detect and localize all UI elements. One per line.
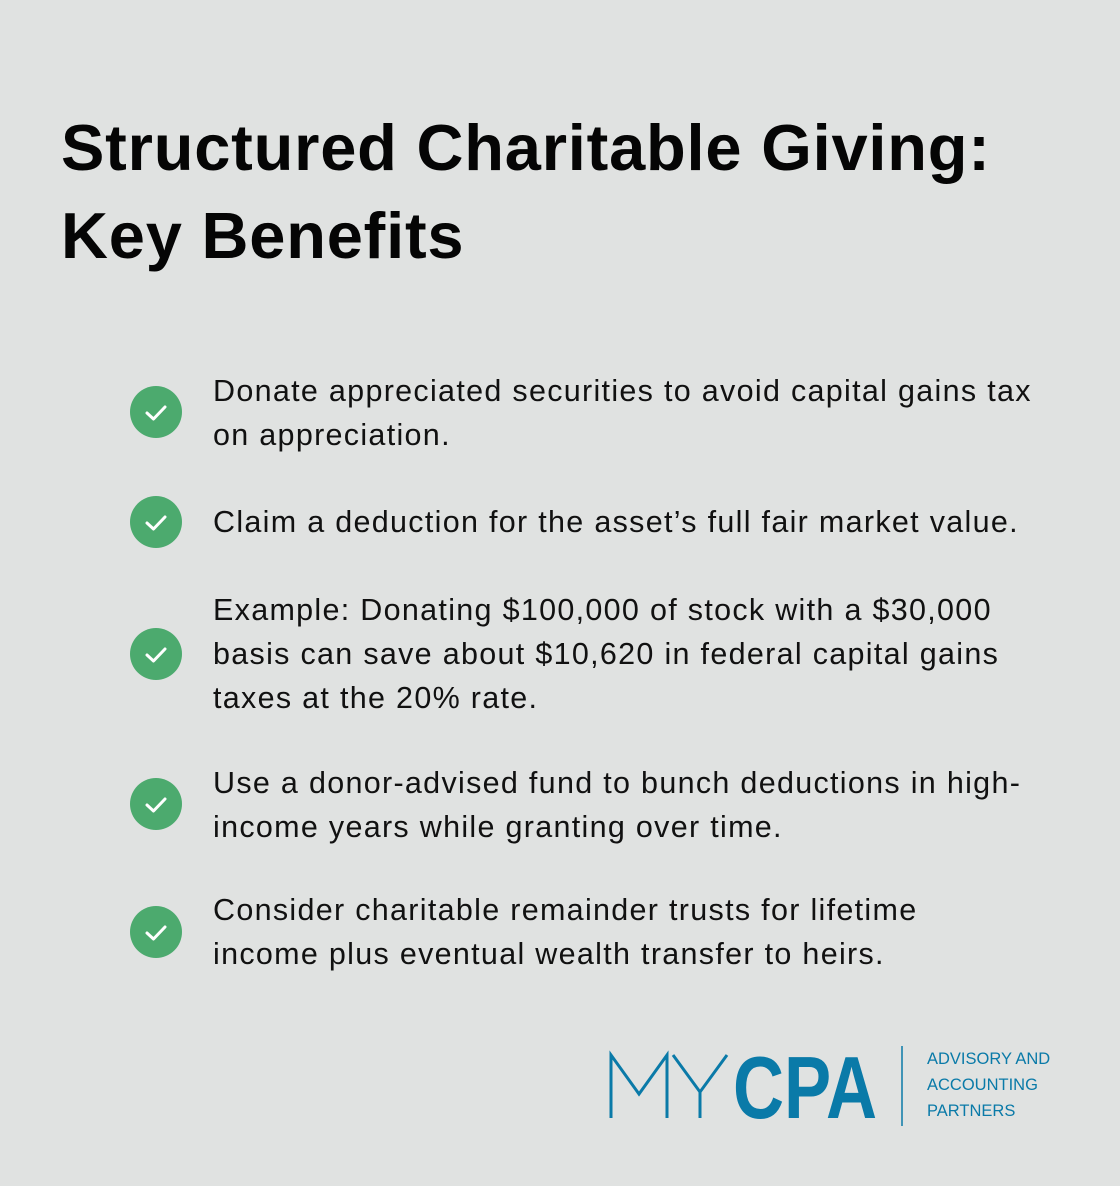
item 2 [130, 496, 1019, 548]
item 4 [130, 766, 1021, 844]
icon: check [130, 496, 182, 548]
text: Use a donor-advised fund to bunch deductions in high- [213, 766, 1021, 800]
logo tagline: ADVISORY AND [927, 1050, 1050, 1068]
text [213, 374, 1032, 452]
item 1 [130, 374, 1032, 452]
text: basis can save about $10,620 in federal capital gains [213, 637, 999, 671]
text: income plus eventual wealth transfer to heirs. [213, 937, 885, 971]
text: Claim a deduction for the asset’s full fair market value. [213, 505, 1019, 539]
text [213, 893, 917, 971]
title: Structured Charitable Giving: [61, 111, 991, 184]
icon: check [130, 906, 182, 958]
text [213, 766, 1021, 844]
icon: check [130, 386, 182, 438]
text: Example: Donating $100,000 of stock with a $30,000 [213, 593, 992, 627]
icon: check [130, 778, 182, 830]
logo wordmark MY [611, 1055, 727, 1118]
icon: check [130, 628, 182, 680]
text [213, 593, 999, 715]
text: income years while granting over time. [213, 810, 783, 844]
title [61, 111, 991, 272]
text: Donate appreciated securities to avoid capital gains tax [213, 374, 1032, 408]
text: Consider charitable remainder trusts for lifetime [213, 893, 917, 927]
item 3 [130, 593, 999, 715]
logo tagline: ACCOUNTING [927, 1076, 1038, 1094]
text: on appreciation. [213, 418, 451, 452]
logo [610, 1040, 1050, 1130]
logo tagline [927, 1050, 1050, 1120]
text: taxes at the 20% rate. [213, 681, 538, 715]
logo tagline: PARTNERS [927, 1102, 1015, 1120]
item 5 [130, 893, 917, 971]
title: Key Benefits [61, 199, 464, 272]
